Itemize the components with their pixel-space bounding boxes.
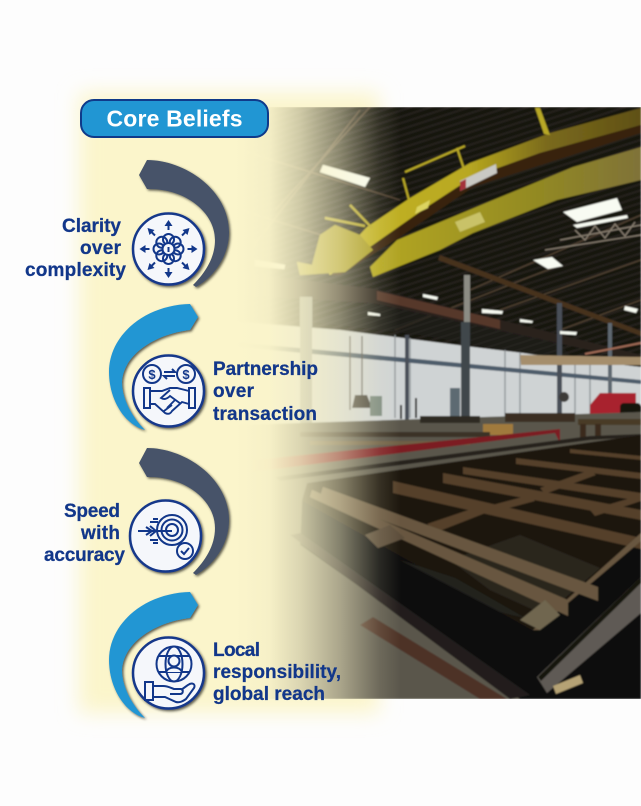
front rail: [290, 533, 530, 699]
columns: [299, 274, 614, 423]
big frame black body: [300, 500, 641, 699]
factory photo: [236, 107, 641, 699]
upper crane beam side: [327, 108, 641, 275]
icon: handshake and coins: $: [148, 367, 156, 382]
belief 1: Clarity over complexity: [25, 160, 229, 287]
shop equipment: [350, 336, 569, 419]
roof truss: [545, 222, 641, 250]
photo fade overlay: [236, 107, 401, 699]
label 1: over: [80, 238, 122, 259]
icon: handshake and coins: [143, 365, 195, 414]
label 1: complexity: [25, 260, 126, 281]
back wall: [273, 326, 641, 424]
ceiling lights: [255, 165, 638, 335]
rusted grid ribs: [393, 449, 641, 549]
belief 4: Local responsibility, global reach: [109, 592, 341, 718]
shop floor: [292, 410, 641, 699]
label 4: responsibility,: [213, 662, 341, 683]
arc 2: [109, 304, 198, 430]
title pill: Core Beliefs: [81, 100, 268, 137]
label 2: transaction: [213, 404, 317, 425]
label 4: [213, 640, 341, 705]
arc 3: [139, 448, 229, 575]
icon: brain with arrows: [140, 220, 198, 278]
infographic: [26, 84, 641, 722]
label 3: accuracy: [44, 545, 125, 566]
frame interior: [302, 435, 641, 630]
icon: target and arrow: [138, 515, 193, 559]
label 1: Clarity: [62, 216, 121, 237]
label 4: Local: [213, 640, 260, 661]
label 2: Partnership: [213, 359, 318, 380]
label 2: over: [213, 381, 255, 402]
girt: [276, 347, 641, 385]
upper crane beam underside: [330, 125, 641, 275]
cream background glow: [79, 93, 379, 713]
tan cross bar: [520, 355, 641, 365]
secondary brown beam: [438, 255, 641, 336]
icon: globe on hand: [145, 646, 195, 702]
circle 2: [133, 356, 204, 426]
arc 1: [139, 160, 229, 287]
circle 1: [133, 214, 204, 284]
arc 4: [109, 592, 198, 718]
circle 4: [133, 638, 204, 708]
crane label: [460, 164, 497, 191]
label 1: [25, 216, 126, 281]
red machine: [590, 393, 636, 417]
label 2: [213, 359, 318, 425]
label 3: with: [80, 523, 120, 544]
crane hoist: [297, 108, 550, 275]
circle 3: [130, 500, 201, 572]
icon: handshake and coins: $: [182, 367, 190, 382]
lower crane beam: [370, 147, 641, 277]
red beam: [289, 428, 560, 466]
tan frame beams: [310, 487, 641, 630]
belief 3: Speed with accuracy: [44, 448, 229, 575]
background workbenches: [300, 413, 641, 445]
title pill: Core Beliefs: Core Beliefs: [106, 106, 242, 132]
label 4: global reach: [213, 684, 325, 705]
ceiling: [301, 107, 641, 366]
label 3: [44, 501, 125, 566]
back floor rail: [275, 434, 641, 481]
label 3: Speed: [64, 501, 120, 522]
runway rail: [328, 285, 641, 356]
belief 2: Partnership over transaction: [109, 304, 318, 430]
